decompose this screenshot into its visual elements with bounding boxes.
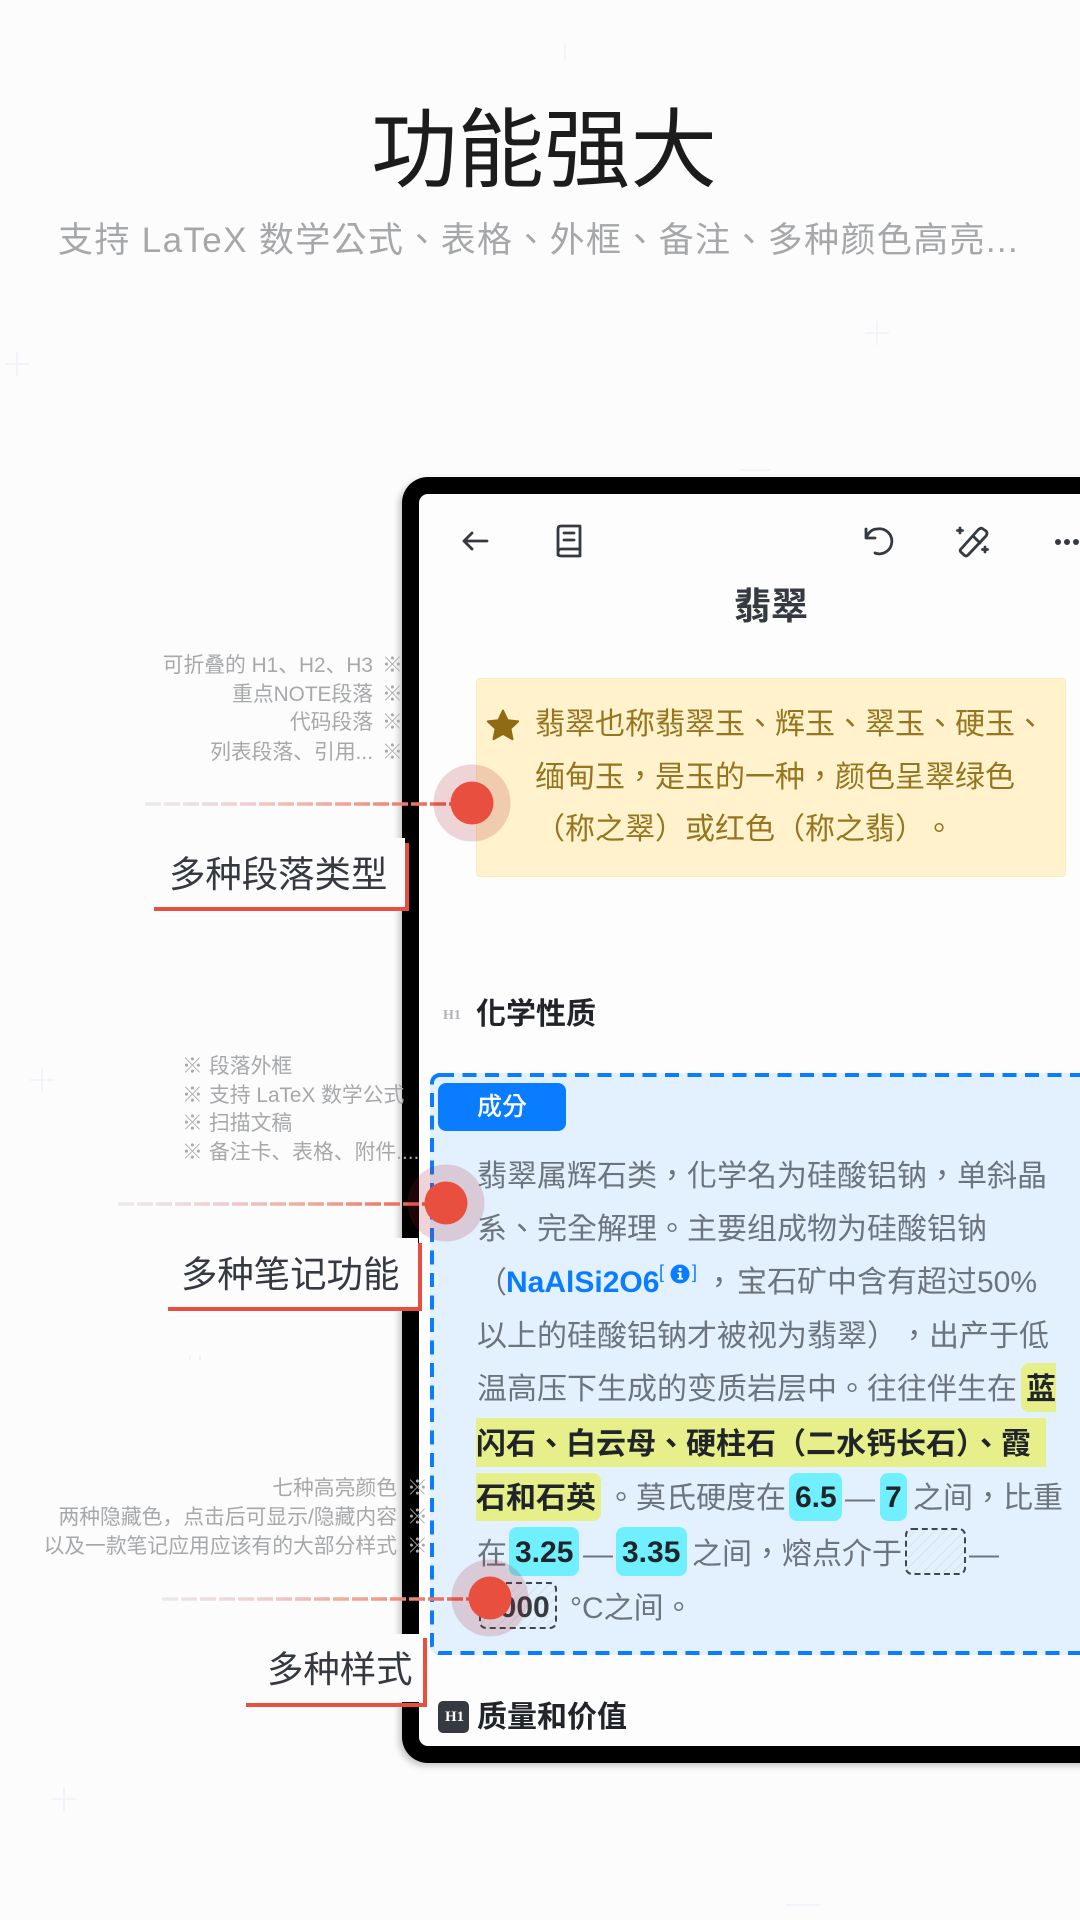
callout list 1: 列表段落、引用... xyxy=(210,741,373,764)
highlight: 6.5: 6.5 xyxy=(795,1481,837,1514)
callout list 3: ※ xyxy=(407,1535,428,1558)
callout list 2: 段落外框 xyxy=(209,1055,292,1078)
callout list 2: ※ xyxy=(182,1112,203,1135)
callout label 2 xyxy=(168,1238,418,1307)
leader line 3 xyxy=(162,1597,490,1601)
body text block: 之间，熔点介于 xyxy=(692,1538,902,1571)
callout list 2: ※ xyxy=(182,1141,203,1164)
highlight: 3.35 xyxy=(616,1527,687,1576)
leader line 2 xyxy=(118,1202,446,1206)
red bracket xyxy=(154,843,409,911)
callout list 3: ※ xyxy=(407,1506,428,1529)
heading text: 质量和价值 xyxy=(477,1701,627,1734)
icon: info circle xyxy=(670,1264,690,1284)
callout list 2: ※ xyxy=(182,1084,203,1107)
callout list 3: 以及一款笔记应用应该有的大部分样式 xyxy=(43,1535,397,1558)
callout list 3: 两种隐藏色，点击后可显示/隐藏内容 xyxy=(58,1506,397,1529)
H1 marker: H1 xyxy=(443,1008,461,1023)
callout list 1: 重点NOTE段落 xyxy=(232,683,373,706)
body text block: 在 xyxy=(477,1538,507,1571)
toolbar icons xyxy=(462,524,1079,558)
body text block: ] xyxy=(692,1262,697,1282)
tag: 成分 xyxy=(438,1083,566,1131)
panel: yellow note xyxy=(476,678,1066,877)
label text: 多种笔记功能 xyxy=(181,1254,399,1295)
icon: back arrow xyxy=(464,533,487,549)
body text block: 翡翠属辉石类，化学名为硅酸铝钠，单斜晶 xyxy=(477,1160,1047,1193)
highlight: green span: 蓝 xyxy=(1026,1373,1056,1406)
body text block: 温高压下生成的变质岩层中。往往伴生在 xyxy=(477,1373,1017,1406)
callout list 1 xyxy=(163,654,403,764)
heading: 化学性质 xyxy=(443,998,596,1031)
label text: 多种样式 xyxy=(267,1649,413,1690)
callout list 2 xyxy=(182,1055,419,1164)
H1 dark marker: H1 xyxy=(445,1709,464,1725)
panel: blue outlined block xyxy=(430,1073,1080,1655)
body text block: 。莫氏硬度在 xyxy=(606,1482,786,1515)
phone frame xyxy=(402,477,1080,1763)
icon: undo xyxy=(866,529,892,554)
body text block: ，出产于低 xyxy=(899,1320,1049,1353)
callout list 2: 扫描文稿 xyxy=(209,1112,292,1135)
dashed outline xyxy=(430,1073,1080,1655)
icon: more dots xyxy=(1055,539,1079,545)
highlight: green span xyxy=(1021,1363,1056,1412)
note text: （称之翠）或红色（称之翡） xyxy=(535,813,925,846)
icon: star xyxy=(486,710,520,740)
note text xyxy=(535,708,1045,846)
highlight: 3.25: 3.25 xyxy=(515,1536,573,1569)
callout label 3 xyxy=(246,1634,423,1702)
callout list 1: 代码段落 xyxy=(290,711,373,734)
body text block: 系、完全解理。主要组成物为硅酸铝钠 xyxy=(477,1213,987,1246)
hidden text block 1 xyxy=(905,1528,966,1575)
highlight: green end: 石和石英 xyxy=(476,1482,596,1515)
icon: magic wand xyxy=(958,528,988,556)
callout list 1: ※ xyxy=(382,741,403,764)
body text block: °C之间。 xyxy=(570,1592,694,1625)
highlight: 3.25 xyxy=(509,1527,579,1576)
icon: book xyxy=(558,526,580,556)
highlight: 7: 7 xyxy=(885,1481,902,1514)
callout list 2: ※ xyxy=(182,1055,203,1078)
hidden text block 2 xyxy=(479,1582,557,1629)
note text: 缅甸玉，是玉的一种，颜色呈翠绿色 xyxy=(535,761,1015,794)
callout list 1: ※ xyxy=(382,711,403,734)
heading text: 化学性质 xyxy=(476,998,596,1031)
body text block: — xyxy=(969,1538,999,1571)
marker 3 xyxy=(452,1560,528,1636)
highlight: 3.35: 3.35 xyxy=(622,1536,680,1569)
callout list 3 xyxy=(43,1477,428,1558)
heading: 质量和价值 xyxy=(438,1701,627,1734)
body text block: — xyxy=(583,1538,613,1571)
highlight: green line xyxy=(476,1418,1046,1467)
body text block: （ xyxy=(477,1267,507,1300)
callout list 2: 备注卡、表格、附件.... xyxy=(209,1141,419,1164)
body text block: ， xyxy=(704,1267,734,1300)
highlight: green end xyxy=(476,1473,601,1521)
highlight: 7 xyxy=(880,1473,907,1521)
note text: 翡翠也称翡翠玉、辉玉、翠玉、硬玉、 xyxy=(535,708,1045,741)
body text block: NaAlSi2O6 xyxy=(506,1266,659,1299)
callout list 3: 七种高亮颜色 xyxy=(272,1477,397,1500)
leader line 1 xyxy=(145,802,472,806)
callout list 1: ※ xyxy=(382,683,403,706)
subtitle: 支持 LaTeX 数学公式、表格、外框、备注、多种颜色高亮... xyxy=(58,221,1019,260)
title: 功能强大 xyxy=(371,103,717,199)
phone screen xyxy=(419,494,1080,1746)
callout list 1: 可折叠的 H1、H2、H3 xyxy=(163,654,373,677)
callout label 1 xyxy=(154,838,405,907)
body text block: — xyxy=(845,1482,875,1515)
callout list 1: ※ xyxy=(382,654,403,677)
marker 1 xyxy=(434,764,510,842)
body text block: 以上的硅酸铝钠才被视为翡翠） xyxy=(477,1320,897,1353)
hidden text block 2: 1000 xyxy=(483,1591,550,1624)
red bracket xyxy=(168,1243,422,1311)
label text: 多种段落类型 xyxy=(169,854,387,895)
note text: 。 xyxy=(924,813,954,846)
callout list 2: 支持 LaTeX 数学公式 xyxy=(209,1084,404,1107)
red bracket xyxy=(246,1638,427,1707)
highlight: green line: 闪石、白云母、硬柱石（二水钙长石）、霞 xyxy=(476,1428,1031,1461)
marker 2 xyxy=(408,1164,484,1242)
highlight: 6.5 xyxy=(789,1473,842,1521)
note title: 翡翠 xyxy=(734,586,808,627)
body text block: 宝石矿中含有超过50% xyxy=(737,1266,1037,1299)
body text block: [ xyxy=(659,1262,664,1282)
callout list 3: ※ xyxy=(407,1477,428,1500)
body text block: 之间，比重 xyxy=(913,1482,1063,1515)
H1 dark marker xyxy=(438,1701,469,1733)
tag: 成分: 成分 xyxy=(477,1093,527,1121)
